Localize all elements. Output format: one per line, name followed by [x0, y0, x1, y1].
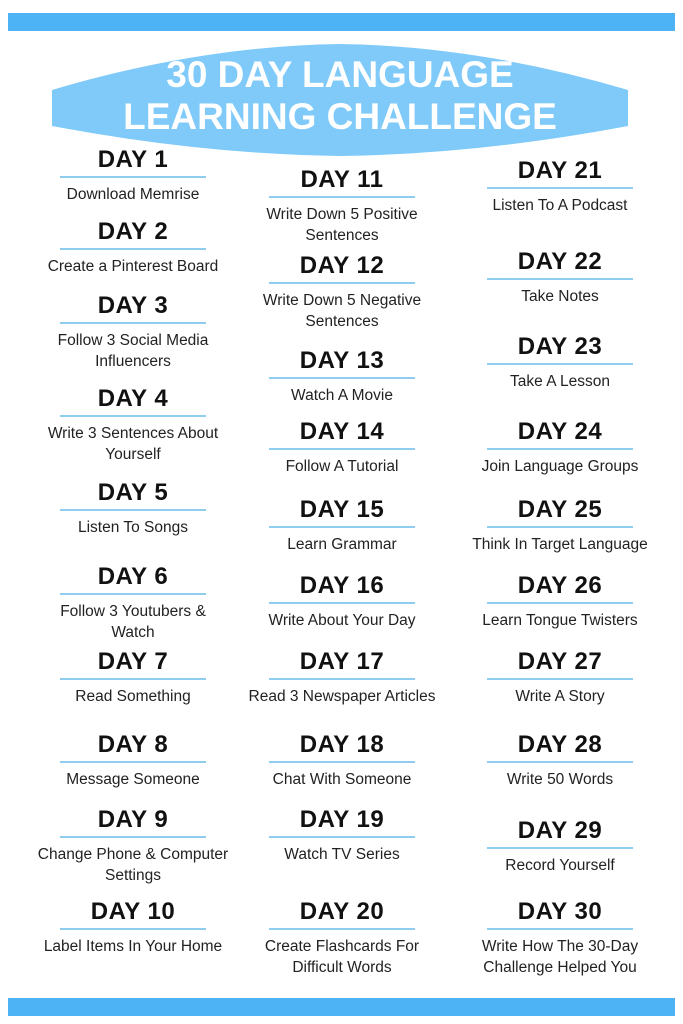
day 2: DAY 2 — [98, 218, 168, 245]
day 26: DAY 26 — [518, 572, 602, 599]
day 7: Read Something — [75, 688, 191, 705]
day 3: DAY 3 — [98, 292, 168, 319]
day 3 — [58, 292, 208, 370]
day 29: DAY 29 — [518, 817, 602, 844]
day 6 — [60, 563, 206, 641]
day 30: Write How The 30-Day — [482, 938, 638, 955]
title banner: 30 DAY LANGUAGE — [166, 54, 514, 95]
day 28 — [487, 731, 633, 788]
day 13 — [269, 347, 415, 404]
day 22: DAY 22 — [518, 248, 602, 275]
day 12: Write Down 5 Negative — [263, 292, 421, 309]
day 9: Change Phone & Computer — [38, 846, 228, 863]
day 23: DAY 23 — [518, 333, 602, 360]
day 20 — [265, 898, 419, 976]
day 7 — [60, 648, 206, 705]
day 14: Follow A Tutorial — [286, 458, 398, 475]
day 19: Watch TV Series — [284, 846, 400, 863]
day 29: Record Yourself — [505, 857, 615, 874]
day 25: DAY 25 — [518, 496, 602, 523]
day 17: Read 3 Newspaper Articles — [249, 688, 435, 705]
day 16: Write About Your Day — [268, 612, 416, 629]
day 21: Listen To A Podcast — [492, 197, 628, 214]
day 7: DAY 7 — [98, 648, 168, 675]
day 9 — [38, 806, 228, 884]
day 3: Influencers — [95, 353, 171, 370]
day 26 — [482, 572, 638, 629]
day 19: DAY 19 — [300, 806, 384, 833]
day 19 — [269, 806, 415, 863]
day 22 — [487, 248, 633, 305]
day 6: DAY 6 — [98, 563, 168, 590]
day 25: Think In Target Language — [472, 536, 648, 553]
day 27: DAY 27 — [518, 648, 602, 675]
day 4: Yourself — [105, 446, 161, 463]
column 3 — [472, 157, 648, 976]
day 18: Chat With Someone — [273, 771, 411, 788]
day 29 — [487, 817, 633, 874]
column 1 — [38, 146, 228, 955]
day 3: Follow 3 Social Media — [58, 332, 208, 349]
day 4: DAY 4 — [98, 385, 168, 412]
day 6: Watch — [111, 624, 155, 641]
day 8 — [60, 731, 206, 788]
day 24: Join Language Groups — [482, 458, 638, 475]
day 12 — [263, 252, 421, 330]
day 10: DAY 10 — [91, 898, 175, 925]
day 8: DAY 8 — [98, 731, 168, 758]
day 17 — [249, 648, 435, 705]
day 5: Listen To Songs — [78, 519, 188, 536]
day 1: Download Memrise — [67, 186, 199, 203]
day 5: DAY 5 — [98, 479, 168, 506]
day 27 — [487, 648, 633, 705]
day 18: DAY 18 — [300, 731, 384, 758]
day 15: DAY 15 — [300, 496, 384, 523]
day 6: Follow 3 Youtubers & — [60, 603, 206, 620]
day 27: Write A Story — [515, 688, 605, 705]
day 23: Take A Lesson — [510, 373, 610, 390]
day 2: Create a Pinterest Board — [48, 258, 218, 275]
day 20: DAY 20 — [300, 898, 384, 925]
day 10 — [44, 898, 222, 955]
day 11 — [266, 166, 418, 244]
day 21 — [487, 157, 633, 214]
day 11: Sentences — [305, 227, 379, 244]
day 21: DAY 21 — [518, 157, 602, 184]
day 12: DAY 12 — [300, 252, 384, 279]
day 15 — [269, 496, 415, 553]
day 5 — [60, 479, 206, 536]
day 18 — [269, 731, 415, 788]
day 4: Write 3 Sentences About — [48, 425, 218, 442]
day 16: DAY 16 — [300, 572, 384, 599]
title banner — [52, 44, 628, 156]
day 1: DAY 1 — [98, 146, 168, 173]
bottom bar — [8, 998, 675, 1016]
day 14 — [269, 418, 415, 475]
day 30 — [482, 898, 638, 976]
day 23 — [487, 333, 633, 390]
day 9: Settings — [105, 867, 161, 884]
day 16 — [268, 572, 416, 629]
day 22: Take Notes — [521, 288, 599, 305]
day 14: DAY 14 — [300, 418, 384, 445]
day 24 — [482, 418, 638, 475]
day 30: Challenge Helped You — [483, 959, 637, 976]
day 20: Difficult Words — [292, 959, 392, 976]
day 13: Watch A Movie — [291, 387, 393, 404]
top bar — [8, 13, 675, 31]
day 20: Create Flashcards For — [265, 938, 419, 955]
day 26: Learn Tongue Twisters — [482, 612, 638, 629]
day 2 — [48, 218, 218, 275]
day 1 — [60, 146, 206, 203]
column 2 — [249, 166, 435, 976]
day 11: Write Down 5 Positive — [266, 206, 418, 223]
day 8: Message Someone — [66, 771, 200, 788]
day 9: DAY 9 — [98, 806, 168, 833]
day 28: Write 50 Words — [507, 771, 613, 788]
day 24: DAY 24 — [518, 418, 602, 445]
day 11: DAY 11 — [300, 166, 384, 193]
day 15: Learn Grammar — [287, 536, 397, 553]
day 28: DAY 28 — [518, 731, 602, 758]
day 30: DAY 30 — [518, 898, 602, 925]
day 12: Sentences — [305, 313, 379, 330]
day 10: Label Items In Your Home — [44, 938, 222, 955]
day 25 — [472, 496, 648, 553]
day 13: DAY 13 — [300, 347, 384, 374]
day 17: DAY 17 — [300, 648, 384, 675]
day 4 — [48, 385, 218, 463]
title banner: LEARNING CHALLENGE — [123, 96, 557, 137]
